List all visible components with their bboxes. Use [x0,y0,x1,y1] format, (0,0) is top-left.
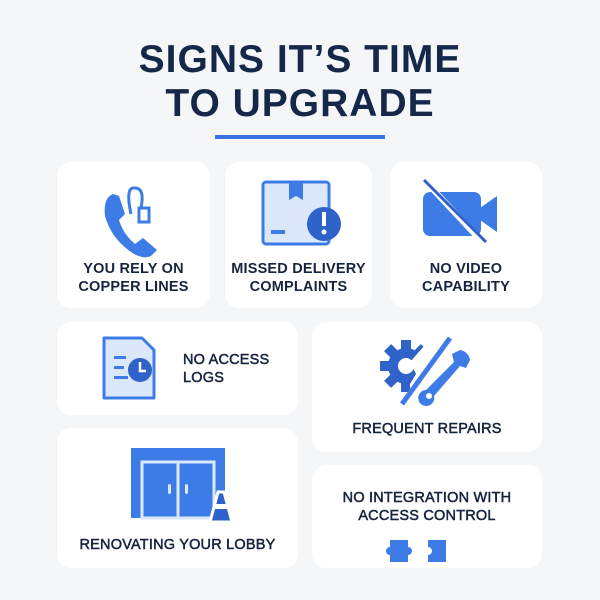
label [343,490,511,524]
icon: gear and wrench [380,336,470,406]
label [231,261,366,295]
label: NO ACCESS [183,352,269,368]
panel: renovating lobby [57,428,298,568]
icon: box with alert [262,180,341,246]
panel: frequent repairs [312,322,542,452]
label: LOGS [183,370,224,386]
icon: doors with cone [131,448,230,520]
label: MISSED DELIVERY [231,261,366,277]
panel: no video [390,162,542,308]
icon: puzzle pieces [386,540,446,562]
title: SIGNS IT’S TIME [139,38,461,81]
label: CAPABILITY [422,279,510,295]
icon: phone [104,186,157,258]
label [422,261,510,295]
icon: video off [423,179,497,243]
title [139,38,461,125]
label: NO VIDEO [430,261,502,277]
panel: missed delivery [225,162,372,308]
label: RENOVATING YOUR LOBBY [80,537,275,553]
label: COMPLAINTS [250,279,347,295]
label [183,352,269,386]
label: COPPER LINES [78,279,189,295]
title: TO UPGRADE [165,82,435,125]
panel: copper lines [57,162,210,308]
panel: no access logs [57,322,298,415]
label [78,261,189,295]
label: YOU RELY ON [83,261,184,277]
label: ACCESS CONTROL [358,508,496,524]
label: NO INTEGRATION WITH [343,490,511,506]
title underline [215,135,385,139]
label: FREQUENT REPAIRS [352,421,502,437]
panel: no integration [312,465,542,568]
icon: document clock [102,336,156,400]
